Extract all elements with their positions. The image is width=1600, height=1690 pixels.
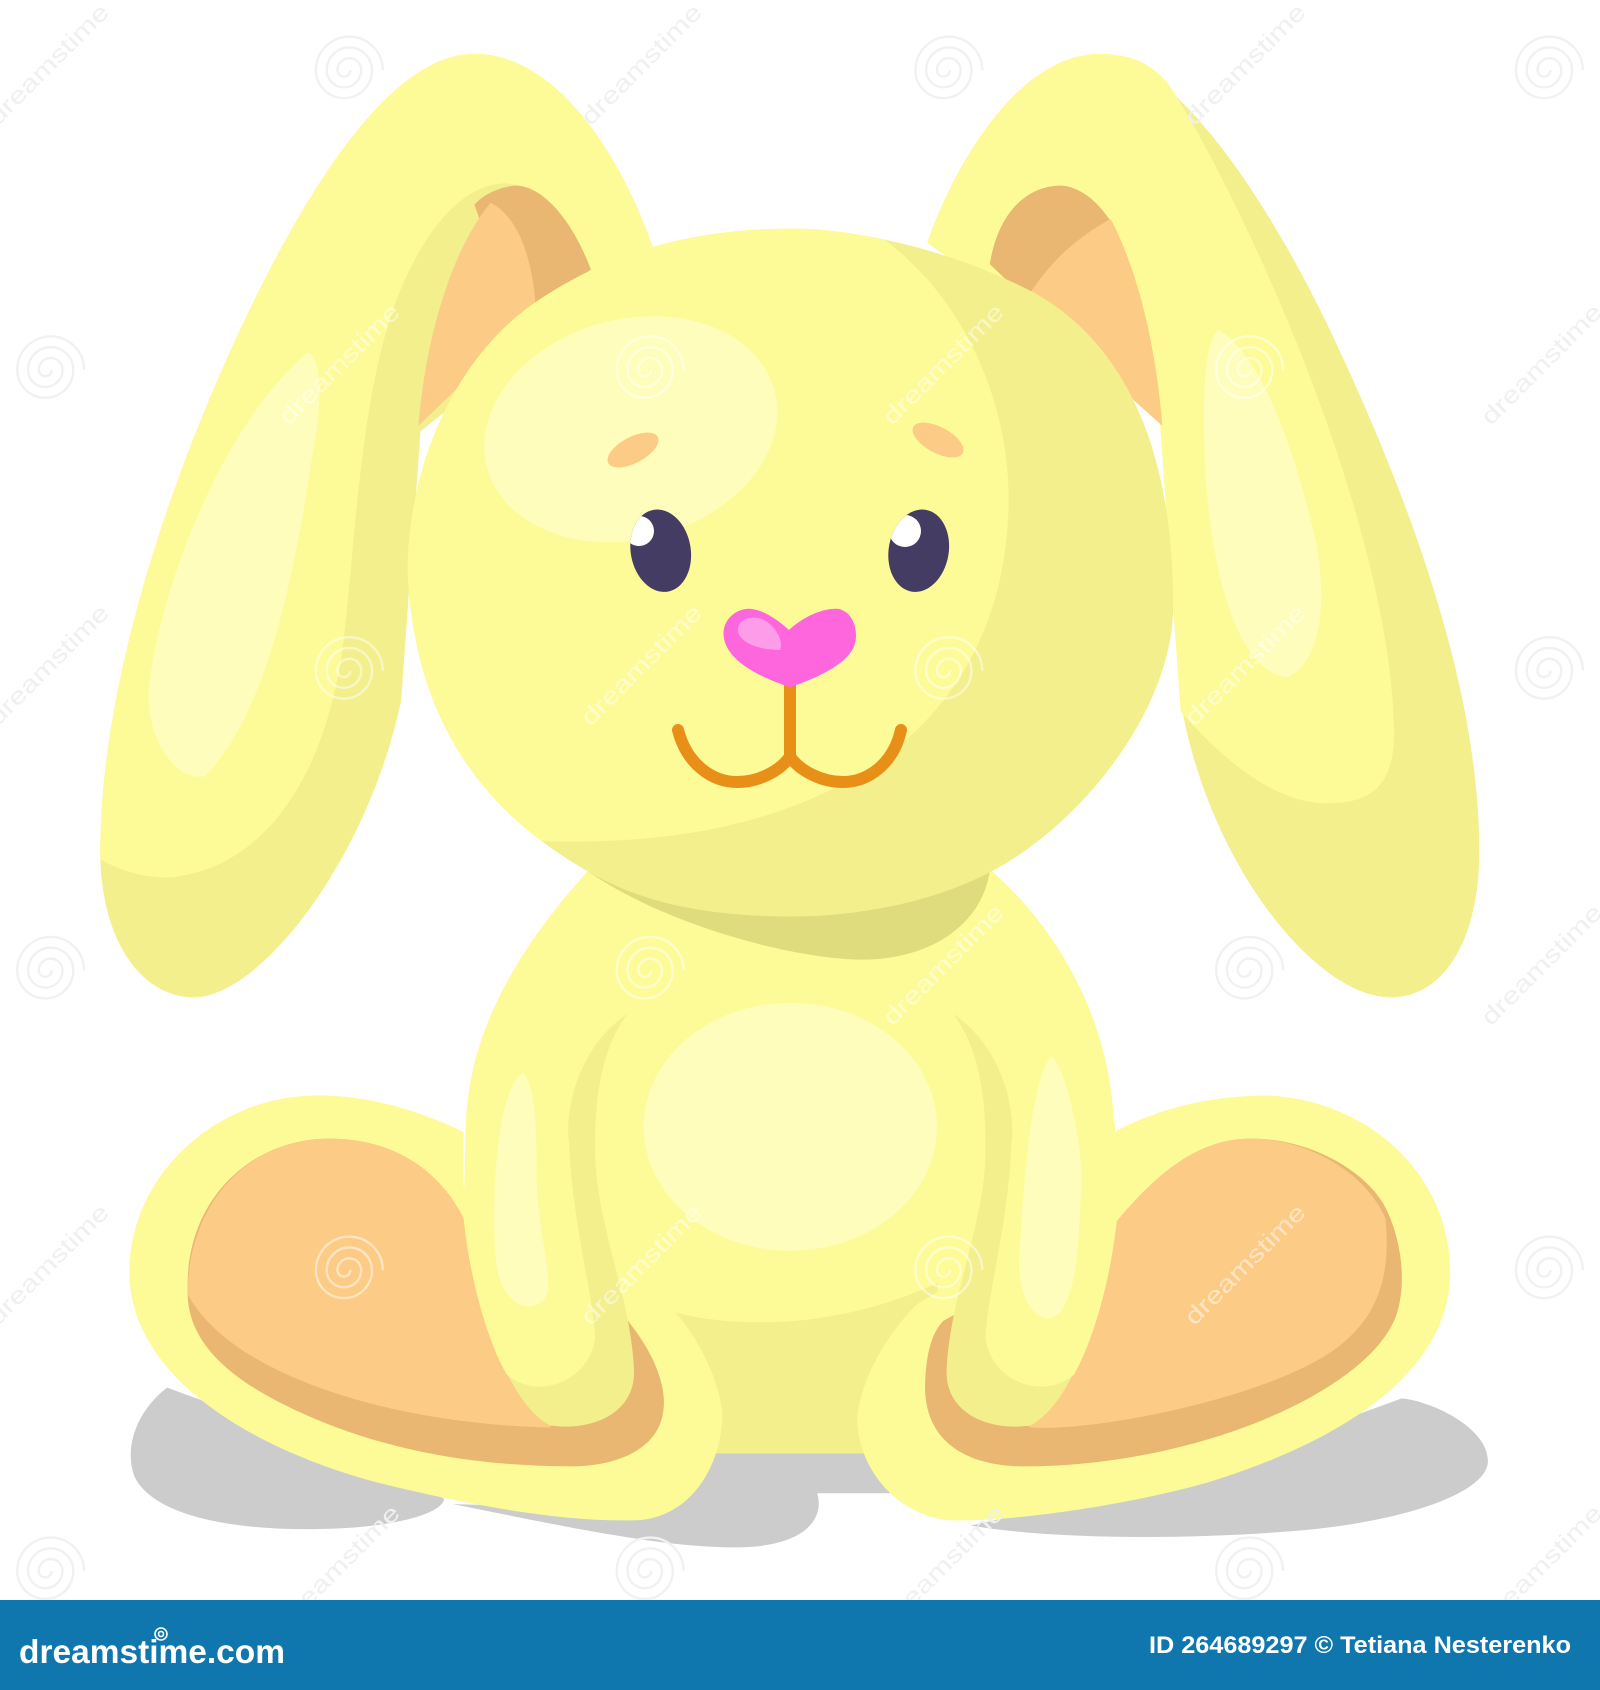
right eyebrow <box>907 415 969 465</box>
right ear <box>927 54 1479 997</box>
image credit: ID 264689297 © Tetiana Nesterenko <box>1149 1632 1571 1659</box>
watermark pattern: dreamstime <box>1180 600 1311 731</box>
face <box>602 415 969 782</box>
watermark pattern: dreamstime <box>878 900 1009 1031</box>
watermark pattern: dreamstime <box>274 1500 406 1632</box>
watermark pattern: dreamstime <box>274 900 406 1031</box>
belly patch <box>644 1003 937 1251</box>
body <box>466 871 1114 1453</box>
left ear <box>100 54 668 997</box>
watermark pattern: dreamstime <box>1477 1500 1600 1632</box>
watermark pattern: dreamstime <box>576 0 708 131</box>
watermark pattern: dreamstime <box>1477 299 1600 430</box>
right arm <box>947 1014 1117 1427</box>
watermark pattern: dreamstime <box>274 299 406 430</box>
footer banner <box>0 1600 1600 1690</box>
left eye <box>630 510 692 592</box>
watermark pattern: dreamstime <box>1477 900 1600 1031</box>
logo text: dreamstime.com <box>19 1633 285 1670</box>
watermark pattern: dreamstime <box>1180 0 1311 131</box>
left arm <box>464 1014 634 1427</box>
left foot <box>129 1095 722 1520</box>
right foot <box>857 1095 1450 1520</box>
right eye <box>888 510 950 592</box>
watermark pattern: dreamstime <box>1180 1200 1311 1331</box>
ground shadow <box>131 1388 1488 1547</box>
nose <box>723 609 856 687</box>
logo spiral <box>155 1628 167 1640</box>
watermark pattern: dreamstime <box>878 299 1009 430</box>
bunny illustration <box>100 54 1488 1547</box>
left eyebrow <box>602 425 664 475</box>
neck shadow <box>588 871 990 960</box>
watermark pattern: dreamstime <box>576 600 708 731</box>
watermark pattern: dreamstime <box>878 1500 1009 1632</box>
watermark pattern: dreamstime <box>576 1200 708 1331</box>
head <box>408 228 1174 916</box>
mouth <box>678 685 901 782</box>
